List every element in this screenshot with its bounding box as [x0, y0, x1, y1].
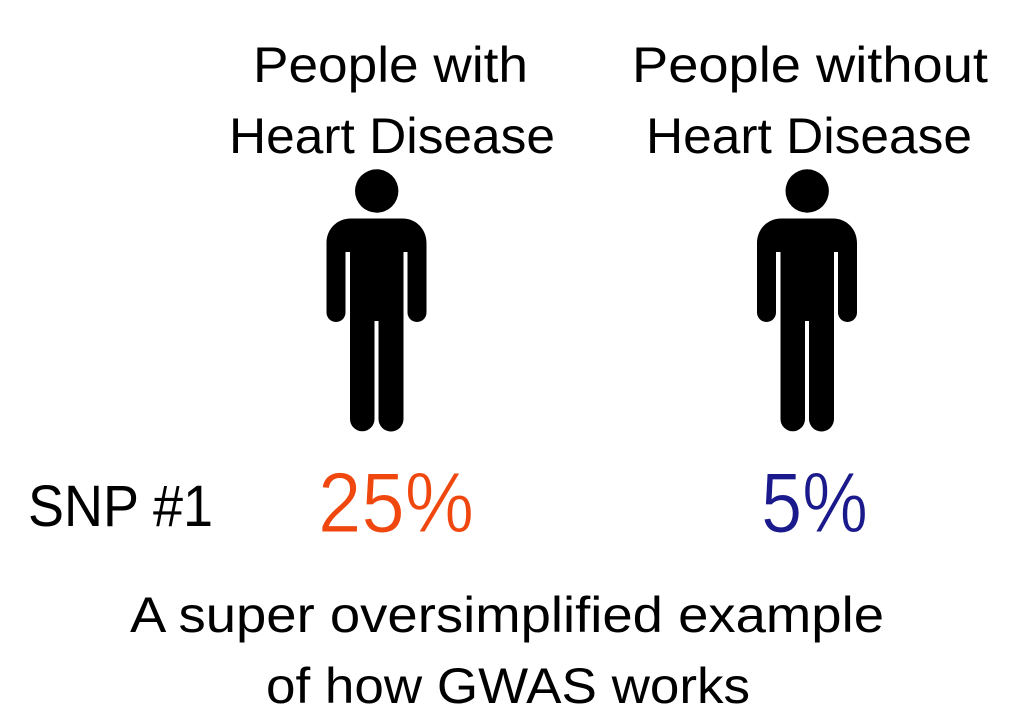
heading: people without heart disease: [632, 37, 988, 164]
heading: people with heart disease: Heart Disease: [229, 108, 555, 164]
caption: [130, 587, 884, 714]
value: 25% with heart disease: 25%: [318, 456, 474, 551]
heading: people without heart disease: People without: [632, 37, 988, 93]
caption: of how GWAS works: [266, 658, 750, 714]
heading: people without heart disease: Heart Disease: [646, 108, 972, 164]
icon: person without heart disease: [757, 169, 857, 432]
icon: person with heart disease: [326, 169, 426, 432]
row label: SNP #1: SNP #1: [28, 474, 213, 539]
heading: people with heart disease: People with: [253, 37, 528, 93]
heading: people with heart disease: [229, 37, 555, 164]
caption: A super oversimplified example: [130, 587, 884, 643]
value: 5% without heart disease: 5%: [761, 456, 868, 551]
